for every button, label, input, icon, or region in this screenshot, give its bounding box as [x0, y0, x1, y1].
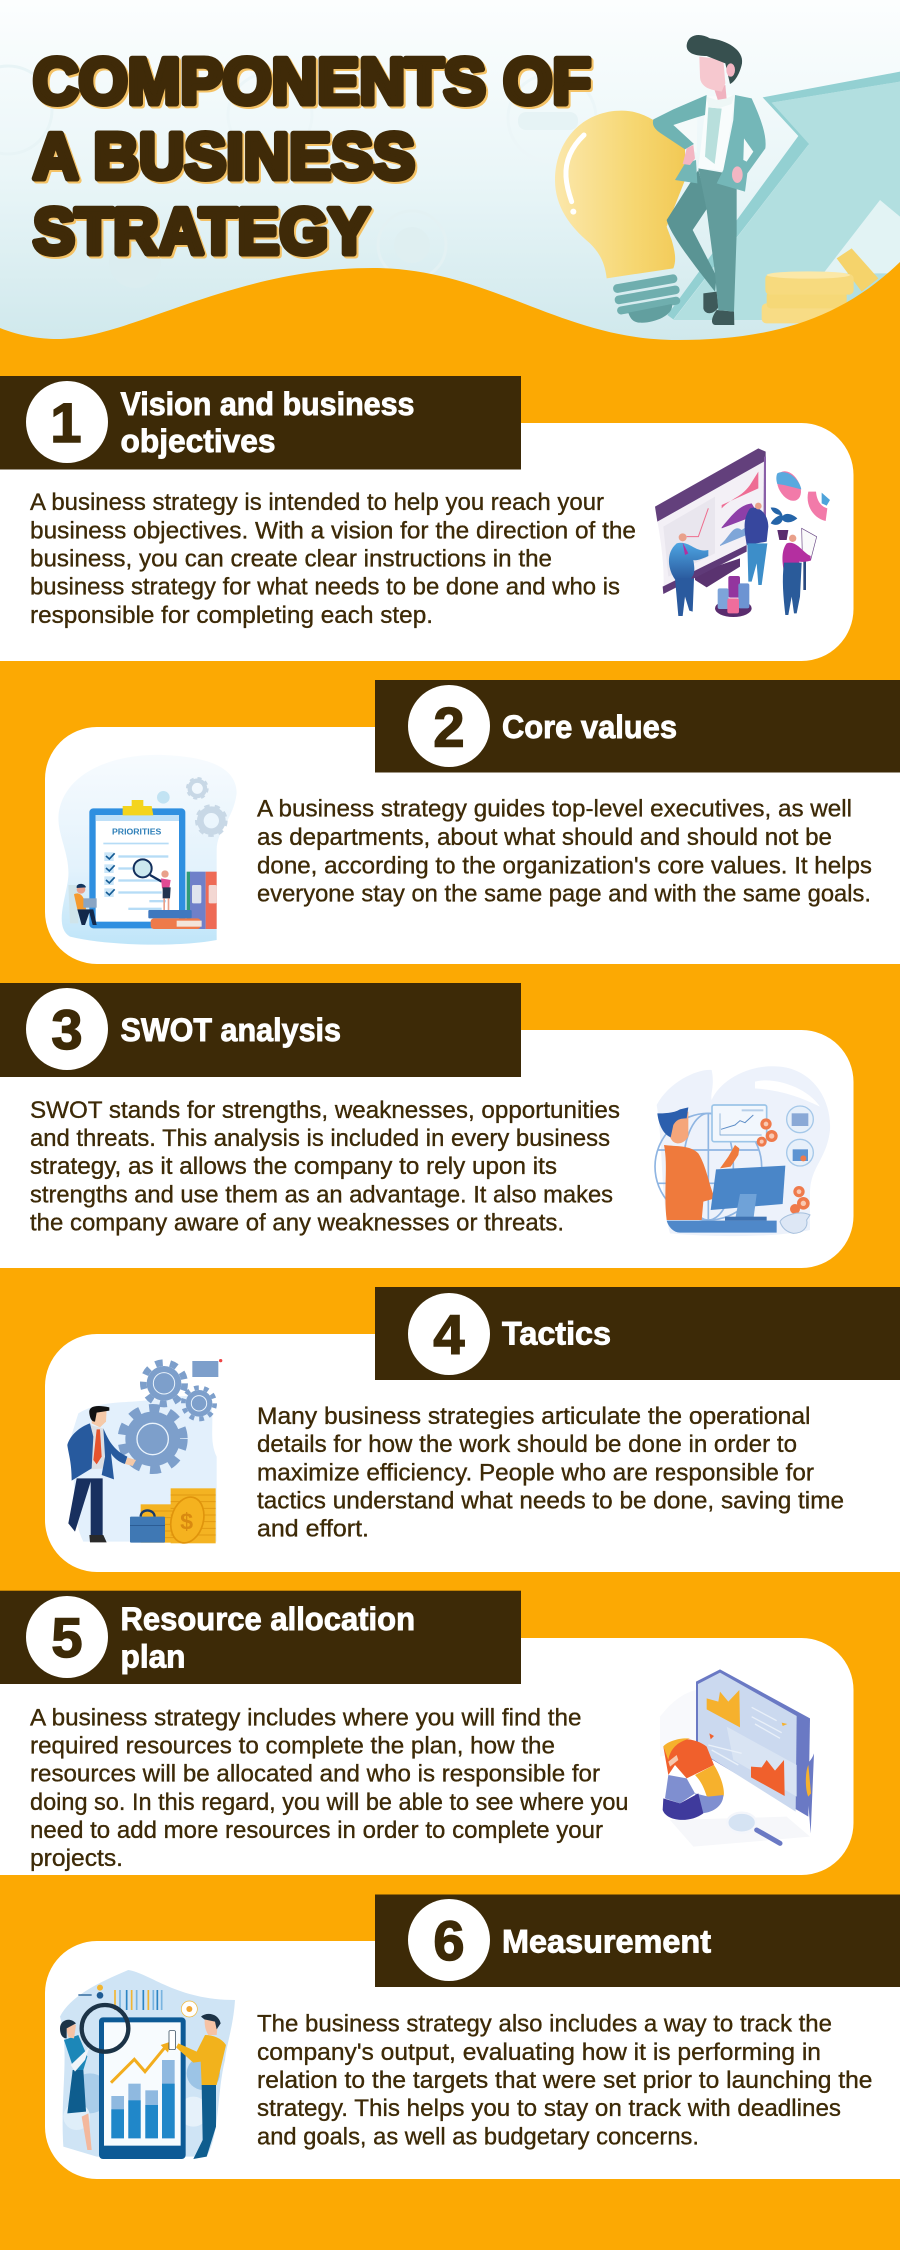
icon: coin stacks — [141, 1488, 216, 1547]
icon: businessman — [653, 35, 766, 325]
card — [0, 423, 854, 661]
body text: projects. — [30, 1845, 123, 1872]
card — [45, 1334, 900, 1572]
body text — [30, 489, 636, 629]
panel: 1 vision and business objectives — [0, 376, 854, 661]
body text: strategy, as it allows the company to rely upon its — [30, 1153, 557, 1180]
title: STRATEGY — [33, 194, 370, 268]
body text — [257, 2011, 873, 2150]
icon: man — [67, 1406, 136, 1542]
body text: maximize efficiency. People who are responsible for — [257, 1460, 814, 1486]
illustration: businessman leaning on light bulb with arrow and coins — [555, 35, 900, 325]
card — [0, 1638, 854, 1875]
illustration: dashboard board with pie chart and magnifier — [660, 1669, 814, 1847]
icon: coins — [762, 248, 878, 323]
card — [0, 1030, 854, 1268]
man — [176, 2014, 226, 2159]
body text: business objectives. With a vision for the direction of the — [30, 517, 636, 544]
body text: and threats. This analysis is included in every business — [30, 1125, 610, 1152]
body text: as departments, about what should and should not be — [257, 824, 832, 851]
illustration: team analysing charts on monitor — [655, 448, 830, 617]
icon: gears — [122, 1363, 215, 1470]
body text: done, according to the organization's core values. It helps — [257, 852, 872, 879]
number badge — [408, 1293, 490, 1375]
body text: business, you can create clear instructions in the — [30, 546, 552, 572]
body text: SWOT stands for strengths, weaknesses, opportunities — [30, 1097, 620, 1124]
illustration: analyst at computer with globe and coins — [655, 1066, 830, 1236]
body text: need to add more resources in order to complete your — [30, 1817, 603, 1844]
body text: A business strategy is intended to help you reach your — [30, 489, 604, 516]
barcode marks — [115, 1990, 162, 2010]
heading bar — [375, 680, 900, 772]
illustration: analysts with bar chart on tablet — [60, 1970, 235, 2159]
heading — [120, 1601, 415, 1674]
label: priorities: PRIORITIES — [112, 828, 162, 837]
body text — [30, 1097, 620, 1237]
body text: and effort. — [257, 1516, 369, 1543]
icon: mail — [192, 1359, 222, 1377]
number badge: 4 — [433, 1303, 465, 1366]
body text — [30, 1704, 628, 1872]
heading: Core values — [502, 709, 677, 745]
title: COMPONENTS OF — [33, 44, 591, 118]
panel: 2 core values — [45, 680, 900, 964]
magnifier ring — [82, 2005, 128, 2052]
number badge: 6 — [433, 1909, 465, 1972]
number badge — [26, 988, 108, 1070]
tablet — [99, 2017, 186, 2159]
heading: Vision and business — [120, 386, 414, 422]
body text: Many business strategies articulate the operational — [257, 1403, 810, 1430]
heading: plan — [120, 1638, 186, 1674]
number badge — [408, 1899, 490, 1981]
number badge: 3 — [51, 998, 83, 1061]
body text: and goals, as well as budgetary concerns. — [257, 2124, 699, 2150]
body text: strategy. This helps you to stay on track with deadlines — [257, 2095, 841, 2122]
bar chart — [111, 2060, 175, 2138]
heading: Measurement — [502, 1924, 711, 1960]
body text: company's output, evaluating how it is performing in — [257, 2039, 821, 2066]
body text: relation to the targets that were set prior to launching the — [257, 2067, 873, 2094]
heading bar — [375, 1894, 900, 1987]
body text: tactics understand what needs to be done, saving time — [257, 1488, 844, 1514]
body text: the company aware of any weaknesses or threats. — [30, 1210, 564, 1237]
body text: resources will be allocated and who is responsible for — [30, 1761, 600, 1788]
heading bar — [0, 983, 521, 1077]
body text: A business strategy guides top-level executives, as well — [257, 796, 852, 823]
heading: Tactics — [502, 1316, 611, 1352]
body text: required resources to complete the plan, how the — [30, 1732, 555, 1760]
icon: coin stacks: $ — [180, 1508, 193, 1534]
illustration: businessman with gears and coins — [67, 1359, 222, 1547]
body text — [257, 1403, 844, 1543]
body text: everyone stay on the same page and with the same goals. — [257, 881, 871, 908]
heading: objectives — [120, 423, 276, 459]
title — [33, 44, 591, 268]
number badge — [26, 381, 108, 463]
woman — [60, 2020, 92, 2150]
card — [45, 1941, 900, 2179]
body text — [257, 796, 872, 908]
panel: 4 tactics — [45, 1287, 900, 1572]
card — [45, 727, 900, 964]
phone — [169, 2031, 175, 2050]
icon: growth arrow — [667, 72, 900, 320]
number badge: 2 — [433, 696, 465, 758]
number badge: 1 — [50, 391, 82, 454]
header background — [0, 0, 900, 345]
number badge — [408, 685, 490, 767]
heading bar — [0, 376, 521, 470]
body text: responsible for completing each step. — [30, 602, 433, 629]
body text: business strategy for what needs to be done and who is — [30, 574, 620, 601]
trend arrow — [111, 2042, 171, 2083]
heading bar — [375, 1287, 900, 1380]
body text: doing so. In this regard, you will be able to see where you — [30, 1789, 628, 1816]
panel: 5 resource allocation plan — [0, 1591, 854, 1875]
illustration: priorities clipboard — [58, 755, 237, 945]
icon: briefcase — [130, 1510, 165, 1543]
title: A BUSINESS — [33, 120, 415, 192]
icon: light bulb — [555, 111, 685, 323]
panel: 6 measurement — [45, 1894, 900, 2179]
body text: A business strategy includes where you will find the — [30, 1704, 582, 1731]
panel: 3 swot analysis — [0, 983, 854, 1268]
body text: strengths and use them as an advantage. It also makes — [30, 1182, 613, 1208]
heading: Resource allocation — [120, 1601, 415, 1637]
number badge: 5 — [51, 1606, 83, 1669]
heading: SWOT analysis — [120, 1012, 341, 1048]
number badge — [26, 1596, 108, 1678]
body text: details for how the work should be done in order to — [257, 1431, 797, 1458]
orange wave — [0, 262, 900, 380]
heading bar — [0, 1591, 521, 1684]
body text: The business strategy also includes a way to track the — [257, 2011, 832, 2038]
heading — [120, 386, 414, 459]
